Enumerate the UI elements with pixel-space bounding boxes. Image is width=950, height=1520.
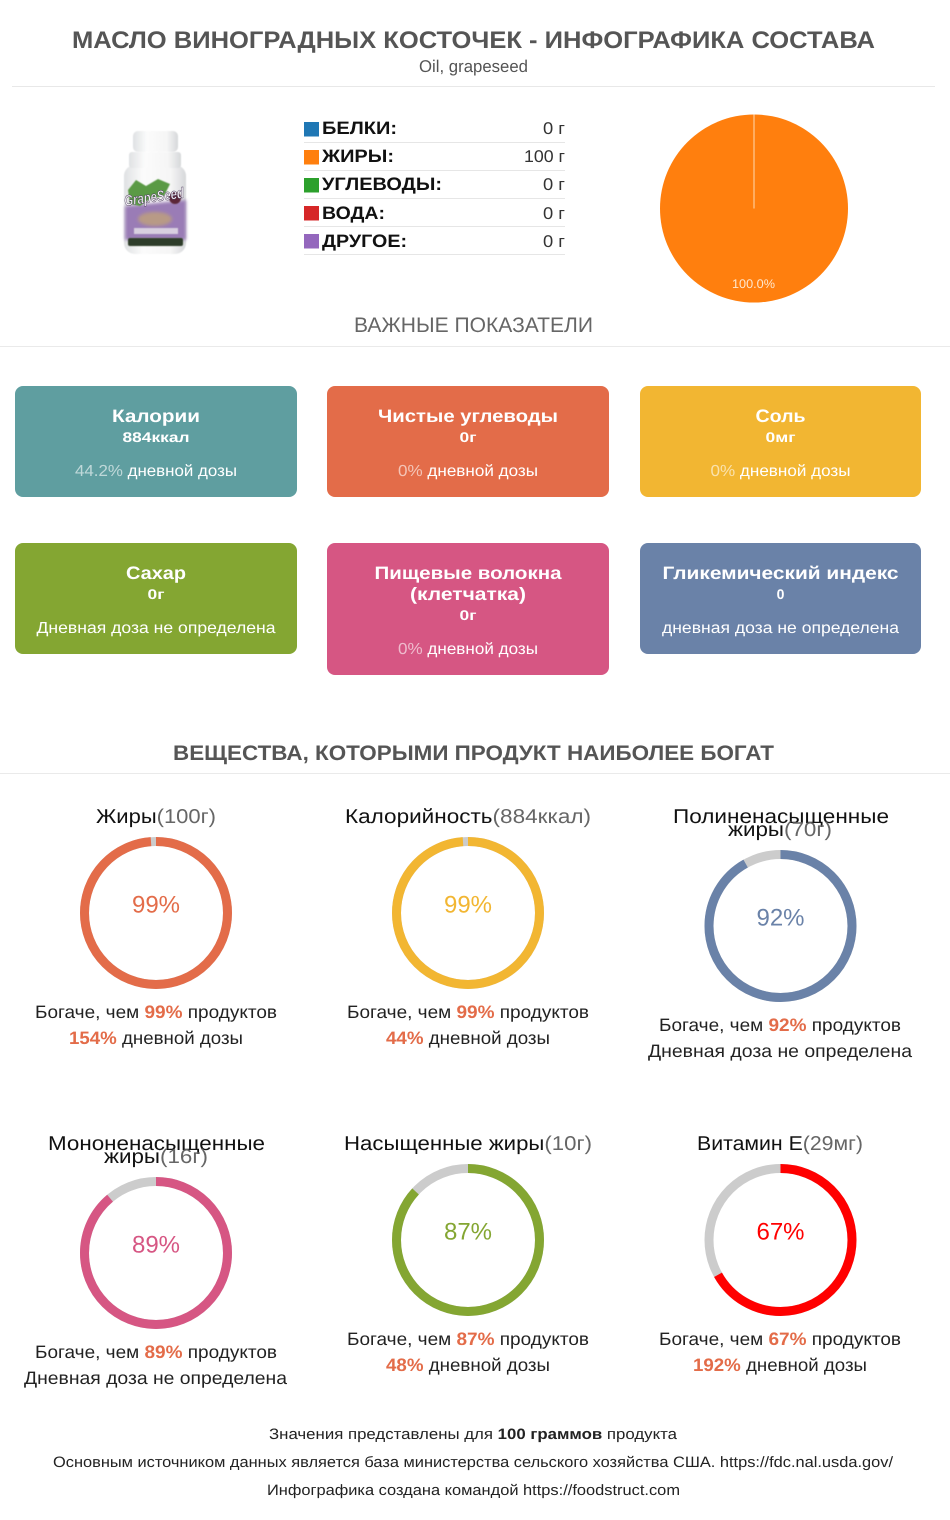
donut: 99%: [84, 842, 228, 984]
footer notes: [53, 1426, 894, 1499]
card: net carbs: [327, 386, 609, 497]
nutrient: vitamin E: Витамин E (29мг): [697, 1133, 863, 1155]
heading: richest nutrients: ВЕЩЕСТВА, КОТОРЫМИ ПРОДУКТ НАИБОЛЕЕ БОГАТ: [173, 742, 774, 765]
card: glycemic index: дневная доза не определена: [662, 620, 899, 637]
footer notes: Инфографика создана командой https://foodstruct.com: [267, 1482, 680, 1499]
footer notes: Основным источником данных является база министерства сельского хозяйства США. https://fdc.nal.usda.gov/: [53, 1454, 894, 1471]
card: calories: [15, 386, 297, 497]
legend table: [304, 118, 565, 254]
nutrient: saturated fats: Насыщенные жиры (10г): [344, 1133, 592, 1155]
legend row: carbs: 0 г: [543, 175, 565, 194]
title: МАСЛО ВИНОГРАДНЫХ КОСТОЧЕК - ИНФОГРАФИКА СОСТАВА: [72, 27, 875, 54]
card: glycemic index: Гликемический индекс: [662, 563, 898, 583]
nutrient: polyunsaturated fats: жиры (70г): [728, 819, 832, 841]
nutrient: vitamin E: Богаче, чем 67% продуктов: [659, 1329, 901, 1349]
card: glycemic index: [640, 543, 921, 654]
nutrient: monounsaturated fats: Мононенасыщенные: [48, 1133, 265, 1155]
legend row: fats: 100 г: [524, 147, 565, 166]
card: net carbs: 0г: [460, 429, 477, 445]
card: net carbs: Чистые углеводы: [378, 406, 558, 426]
legend row: water: ВОДА:: [322, 203, 385, 223]
card: sugar: 0г: [148, 586, 165, 602]
donut: 67%: 67%: [756, 1218, 805, 1245]
footer notes: Значения представлены для 100 граммов продукта: [269, 1426, 678, 1443]
icon: grapeseed oil bottle: GrapeSeed: [123, 185, 186, 210]
legend row: other: 0 г: [543, 232, 565, 251]
legend row: carbs: [304, 174, 565, 198]
donut: 67%: [709, 1168, 852, 1312]
donut: 87%: [396, 1168, 540, 1312]
nutrient: vitamin E: 192% дневной дозы: [693, 1355, 867, 1375]
nutrient: polyunsaturated fats: [648, 806, 913, 1061]
nutrient: calories: 44% дневной дозы: [386, 1028, 550, 1048]
legend row: other: ДРУГОЕ:: [322, 231, 407, 251]
nutrient: monounsaturated fats: [24, 1133, 288, 1388]
donut: 99%: [396, 842, 540, 984]
nutrient: saturated fats: Богаче, чем 87% продуктов: [347, 1329, 589, 1349]
legend row: fats: [304, 146, 565, 170]
pie chart: [660, 114, 848, 302]
card: sugar: Дневная доза не определена: [36, 620, 276, 637]
nutrient: polyunsaturated fats: Полиненасыщенные: [673, 806, 889, 828]
legend row: other: [304, 231, 565, 254]
donut: 89%: [84, 1182, 228, 1324]
card: fiber: Пищевые волокна: [374, 563, 563, 583]
legend row: proteins: БЕЛКИ:: [322, 118, 397, 138]
donut: 87%: 87%: [444, 1218, 492, 1245]
card: sugar: [15, 543, 297, 654]
card: sugar: Сахар: [126, 563, 186, 583]
nutrient: polyunsaturated fats: Богаче, чем 92% продуктов: [659, 1015, 901, 1035]
donut: 92%: [709, 854, 852, 998]
nutrient: fats: 154% дневной дозы: [69, 1028, 243, 1048]
legend row: carbs: УГЛЕВОДЫ:: [322, 174, 442, 194]
card: salt: [640, 386, 921, 497]
icon: grapeseed oil bottle: [123, 131, 186, 254]
donut: 89%: 89%: [132, 1231, 180, 1258]
donut: 99%: 99%: [132, 891, 180, 918]
donut: 92%: 92%: [756, 904, 805, 931]
nutrient: fats: [35, 806, 277, 1048]
donut: 99%: 99%: [444, 891, 492, 918]
nutrient: fats: Жиры (100г): [96, 806, 216, 828]
nutrient: fats: Богаче, чем 99% продуктов: [35, 1002, 277, 1022]
nutrient: saturated fats: 48% дневной дозы: [386, 1355, 550, 1375]
card: salt: Соль: [756, 406, 806, 426]
nutrient: calories: Калорийность (884ккал): [345, 806, 591, 828]
card: glycemic index: 0: [777, 586, 785, 602]
nutrient: monounsaturated fats: Дневная доза не определена: [24, 1368, 288, 1388]
legend row: proteins: 0 г: [543, 119, 565, 138]
subtitle: Oil, grapeseed: [419, 57, 528, 76]
card: calories: Калории: [112, 406, 200, 426]
card: fiber: 0% дневной дозы: [398, 641, 538, 658]
card: fiber: 0г: [460, 607, 477, 623]
card: fiber: (клетчатка): [410, 584, 526, 604]
card: calories: 44.2% дневной дозы: [75, 463, 237, 480]
nutrient: polyunsaturated fats: Дневная доза не определена: [648, 1041, 913, 1061]
card: fiber: [327, 543, 609, 675]
card: salt: 0% дневной дозы: [710, 463, 850, 480]
nutrient: monounsaturated fats: Богаче, чем 89% продуктов: [35, 1342, 277, 1362]
nutrient: calories: [345, 806, 591, 1048]
card: net carbs: 0% дневной дозы: [398, 463, 538, 480]
legend row: water: [304, 203, 565, 226]
nutrient: vitamin E: [659, 1133, 901, 1375]
card: calories: 884ккал: [122, 429, 190, 445]
nutrient: monounsaturated fats: жиры (16г): [104, 1146, 208, 1168]
legend row: water: 0 г: [543, 204, 565, 223]
heading: key indicators: ВАЖНЫЕ ПОКАЗАТЕЛИ: [354, 314, 593, 337]
nutrient: saturated fats: [344, 1133, 592, 1375]
legend row: fats: ЖИРЫ:: [321, 146, 394, 166]
pie chart: 100.0%: [732, 277, 775, 291]
nutrient: calories: Богаче, чем 99% продуктов: [347, 1002, 589, 1022]
legend row: proteins: [304, 118, 565, 142]
card: salt: 0мг: [766, 429, 796, 445]
